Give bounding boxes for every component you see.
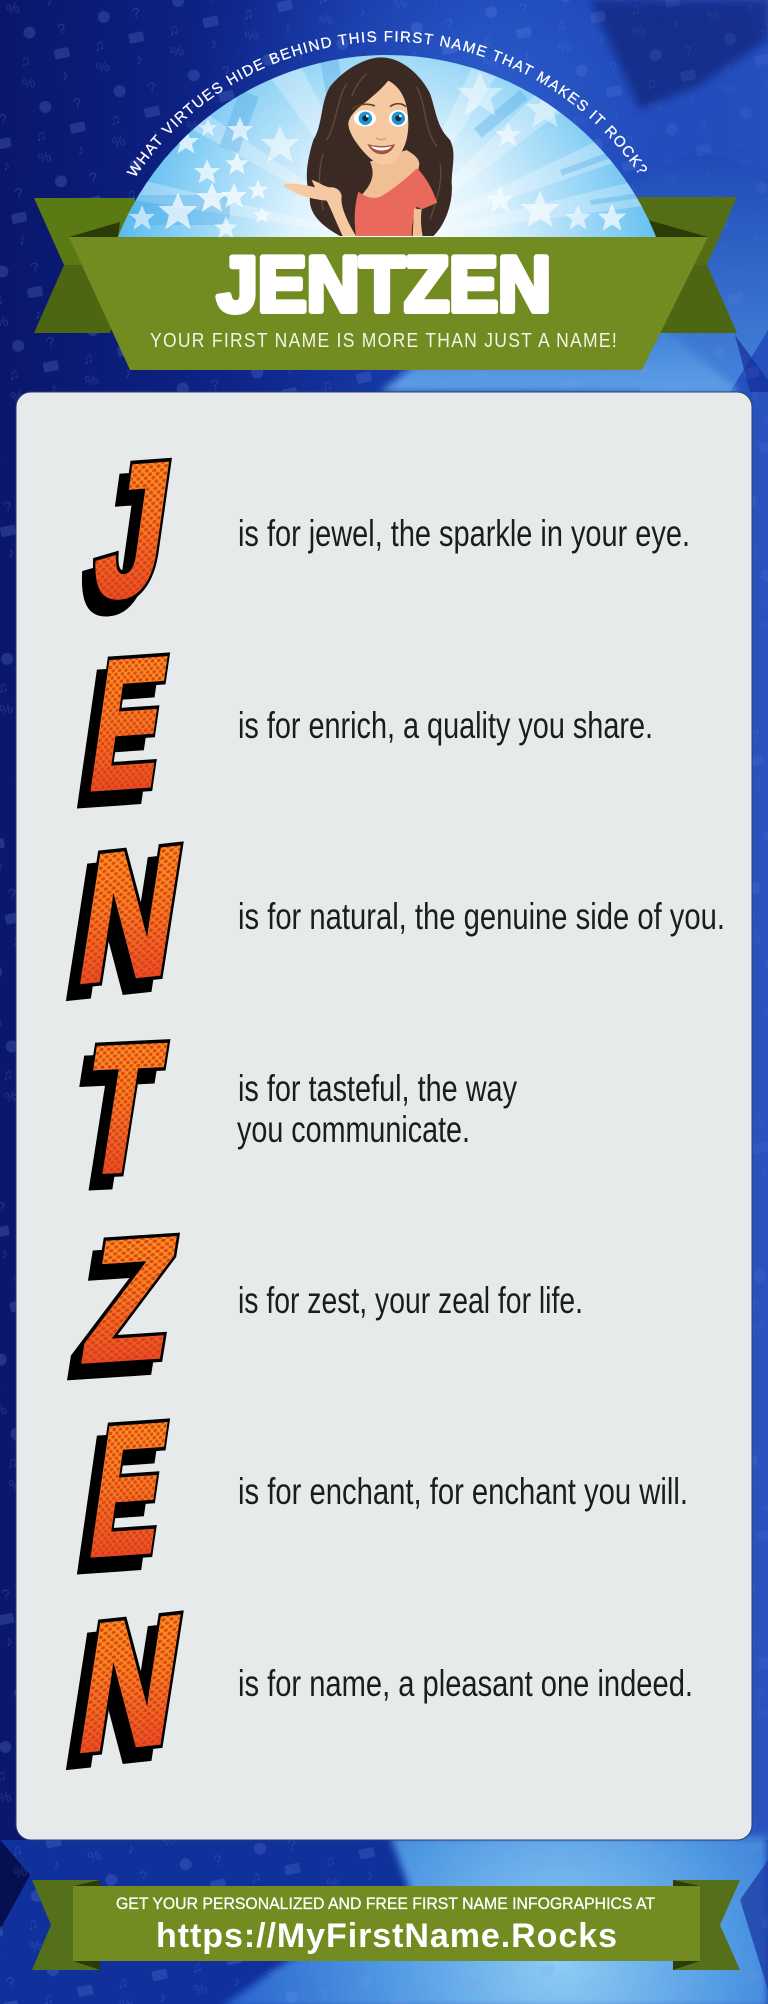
letter J: J bbox=[84, 422, 182, 638]
hair bbox=[307, 57, 453, 236]
letter T: T bbox=[71, 1005, 173, 1212]
footer call to action: GET YOUR PERSONALIZED AND FREE FIRST NAME INFOGRAPHICS AT bbox=[116, 1894, 655, 1913]
letter N: N bbox=[67, 1577, 194, 1792]
back ribbon tails bbox=[34, 197, 737, 333]
right tail bbox=[637, 197, 737, 333]
row: N bbox=[56, 808, 725, 1036]
row: E bbox=[68, 1385, 688, 1609]
letter T: T bbox=[60, 1018, 162, 1225]
curved tagline: WHAT VIRTUES HIDE BEHIND THIS FIRST NAME THAT MAKES IT ROCK? bbox=[126, 31, 647, 176]
row: J bbox=[73, 422, 690, 651]
eyes bbox=[354, 110, 408, 127]
nose bbox=[376, 138, 386, 140]
text: you communicate. bbox=[237, 1109, 470, 1150]
letter N: N bbox=[67, 808, 194, 1023]
subtitle: YOUR FIRST NAME IS MORE THAN JUST A NAME! bbox=[150, 329, 618, 352]
text bbox=[237, 1068, 517, 1150]
dome with rays and stars bbox=[118, 55, 656, 237]
character: smiling woman bbox=[284, 57, 453, 236]
hair highlights bbox=[319, 73, 441, 220]
footer left tail bbox=[32, 1880, 100, 1970]
letter J: J bbox=[84, 422, 182, 638]
letter N: N bbox=[67, 808, 194, 1023]
letter J: J bbox=[73, 435, 171, 651]
row: E bbox=[68, 619, 653, 843]
letter E: E bbox=[79, 1385, 178, 1596]
left tail bbox=[34, 198, 135, 333]
text: is for enrich, a quality you share. bbox=[238, 705, 653, 746]
letter N: N bbox=[67, 1577, 194, 1792]
row: N bbox=[56, 1577, 693, 1805]
sunburst rays bbox=[136, 68, 642, 226]
text: is for zest, your zeal for life. bbox=[238, 1280, 583, 1321]
letter E: E bbox=[79, 1385, 178, 1596]
text: is for tasteful, the way bbox=[238, 1068, 517, 1109]
right arm bbox=[413, 208, 423, 236]
name title: JENTZEN bbox=[217, 240, 551, 328]
letter T: T bbox=[71, 1005, 173, 1212]
footer url: https://MyFirstName.Rocks bbox=[156, 1917, 617, 1955]
letter E: E bbox=[68, 1398, 167, 1609]
main ribbon bbox=[69, 237, 708, 370]
letter Z: Z bbox=[62, 1215, 176, 1412]
shirt bbox=[355, 168, 437, 236]
letter J: J bbox=[84, 422, 182, 638]
footer right tail bbox=[673, 1880, 740, 1970]
row: Z bbox=[62, 1202, 583, 1412]
letter N: N bbox=[67, 1577, 194, 1792]
letter T: T bbox=[71, 1005, 173, 1212]
letter N: N bbox=[56, 1590, 183, 1805]
face bbox=[348, 81, 408, 164]
letter E: E bbox=[79, 1385, 178, 1596]
letter Z: Z bbox=[73, 1202, 187, 1399]
mouth bbox=[367, 144, 395, 154]
letter E: E bbox=[79, 619, 178, 830]
letter E: E bbox=[79, 619, 178, 830]
letter E: E bbox=[68, 632, 167, 843]
stars bbox=[129, 72, 626, 238]
footer ribbon bbox=[32, 1880, 740, 1970]
neck and chest bbox=[360, 150, 419, 207]
letter Z: Z bbox=[73, 1202, 187, 1399]
panel: letters list bbox=[16, 392, 752, 1840]
letter N: N bbox=[67, 808, 194, 1023]
letter E: E bbox=[79, 619, 178, 830]
letter N: N bbox=[56, 821, 183, 1036]
row: T bbox=[60, 1005, 517, 1225]
letter Z: Z bbox=[73, 1202, 187, 1399]
brows bbox=[352, 104, 406, 109]
left arm and hand bbox=[284, 180, 356, 236]
